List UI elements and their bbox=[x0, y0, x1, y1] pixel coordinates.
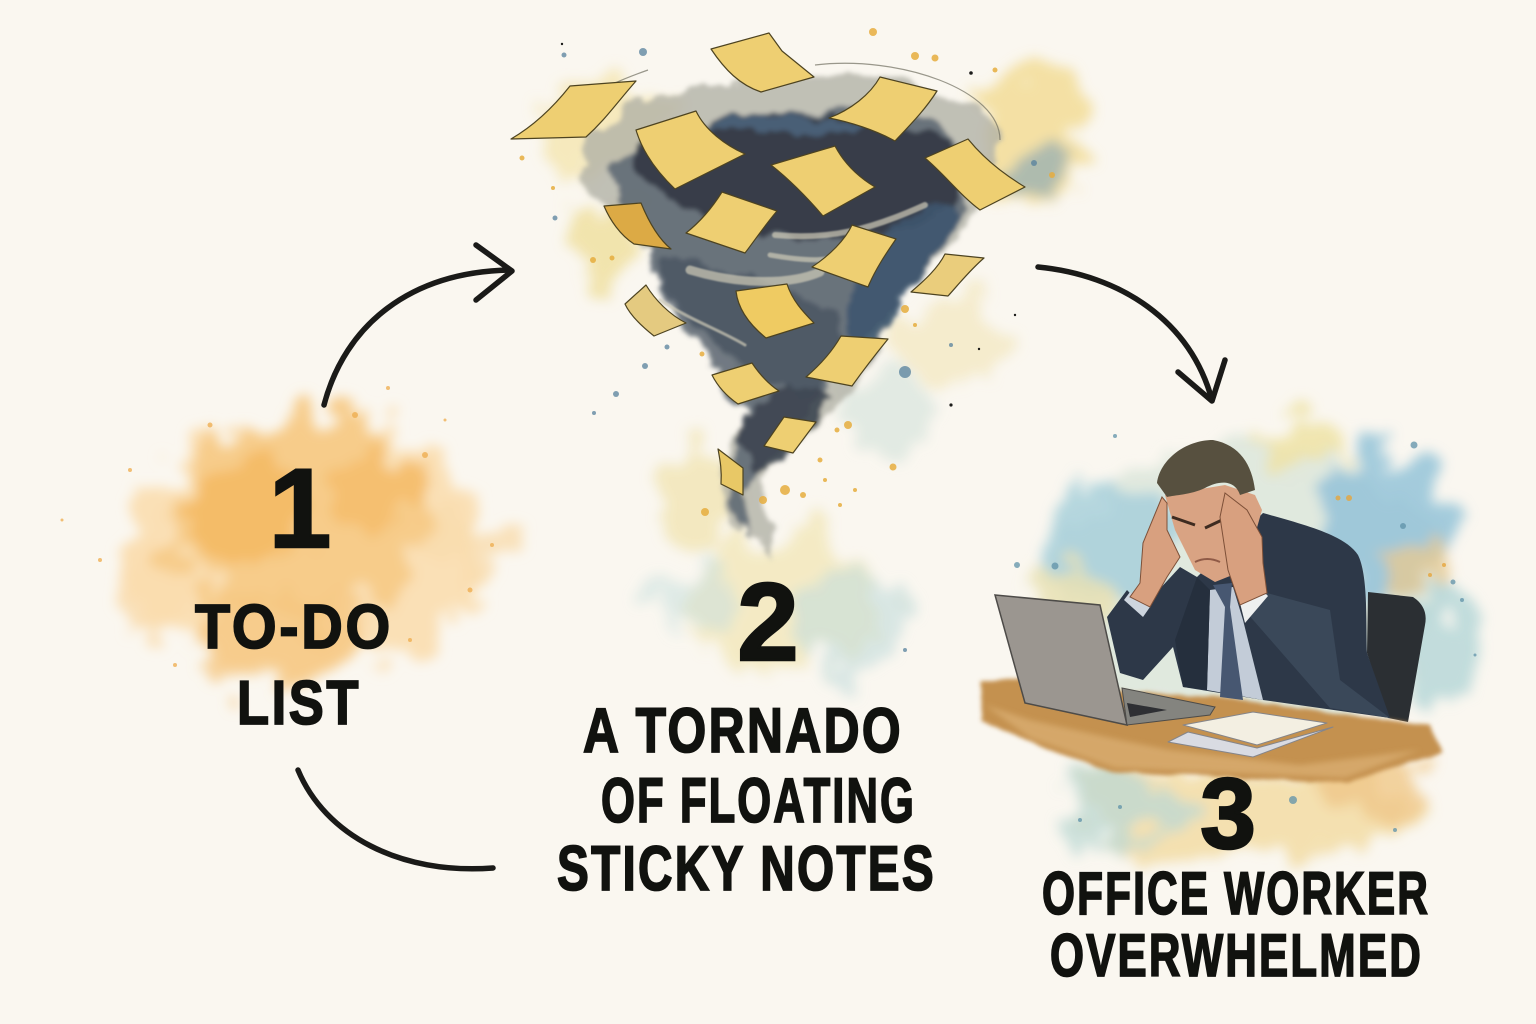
man: head and hair bbox=[1157, 440, 1262, 582]
panel: step 1 to-do list bbox=[60, 386, 510, 738]
number 1: 1 bbox=[269, 446, 331, 571]
laptop bbox=[995, 595, 1215, 725]
swirl streaks bbox=[660, 205, 925, 345]
orange watercolor wash bbox=[113, 415, 510, 688]
label: a tornado of floating sticky notes: STICKY NOTES bbox=[557, 834, 936, 904]
splatter bbox=[520, 28, 1055, 516]
blue and yellow wash bbox=[1030, 417, 1465, 855]
label: a tornado of floating sticky notes: OF FLOATING bbox=[601, 766, 916, 836]
desk bbox=[980, 677, 1442, 782]
tornado funnel bbox=[582, 70, 1000, 558]
label: office worker overwhelmed bbox=[1042, 860, 1430, 989]
label: to-do list: TO-DO bbox=[195, 593, 393, 662]
man: hands on temples bbox=[1130, 493, 1267, 607]
label: a tornado of floating sticky notes bbox=[557, 696, 936, 904]
man: torso and suit bbox=[1107, 513, 1390, 718]
splatter bbox=[1014, 434, 1476, 832]
papers bbox=[1168, 712, 1333, 757]
arrow: step 1 to step 2 bbox=[324, 245, 512, 405]
number 3: 3 bbox=[1200, 758, 1256, 870]
arrow: return to step 1 bbox=[298, 770, 493, 869]
tornado outer outlines bbox=[580, 63, 1000, 140]
panel: step 3 office worker bbox=[980, 417, 1476, 989]
chair bbox=[1367, 592, 1426, 722]
label: a tornado of floating sticky notes: A TORNADO bbox=[583, 696, 903, 766]
orange splatter bbox=[60, 386, 494, 667]
label: to-do list bbox=[195, 593, 393, 738]
yellow and blue wash bbox=[540, 65, 1085, 670]
label: to-do list: LIST bbox=[237, 669, 361, 738]
number 2: 2 bbox=[737, 561, 799, 684]
panel: step 2 tornado bbox=[511, 28, 1085, 904]
sticky notes bbox=[511, 33, 1025, 495]
arrow: step 2 to step 3 bbox=[1038, 267, 1225, 401]
